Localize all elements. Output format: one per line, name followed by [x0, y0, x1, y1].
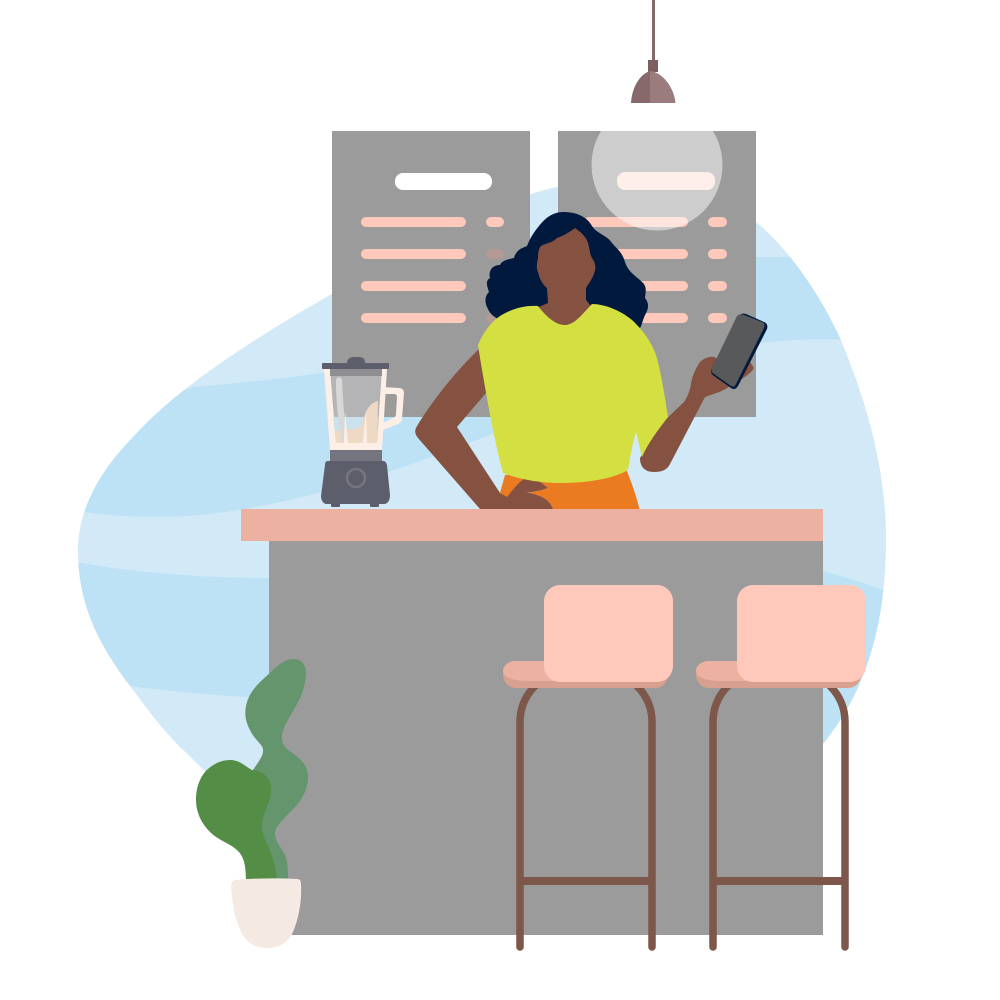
menu board left	[332, 131, 530, 417]
pendant lamp	[631, 0, 676, 103]
motor base	[321, 461, 390, 504]
smoothie	[335, 401, 378, 443]
potted plant	[196, 659, 308, 948]
back leaf	[245, 659, 308, 885]
left arm	[415, 349, 553, 509]
background blob	[78, 186, 886, 772]
feet	[331, 502, 340, 507]
jar glass	[330, 369, 382, 443]
stool right	[696, 585, 866, 947]
dial	[347, 469, 365, 487]
jar handle	[381, 387, 404, 431]
hair	[485, 212, 648, 328]
woman	[415, 212, 767, 509]
motor collar	[330, 450, 382, 461]
menu board right	[558, 100, 756, 417]
face and neck	[532, 228, 595, 332]
right arm	[640, 357, 754, 472]
pot	[231, 878, 301, 948]
jar highlights	[336, 377, 346, 443]
front leaf	[196, 760, 277, 885]
lid	[347, 357, 365, 363]
upper blue band	[60, 257, 860, 517]
lamp light pool	[592, 131, 722, 230]
shirt	[478, 304, 668, 483]
phone	[711, 314, 767, 389]
blender	[321, 357, 404, 507]
skirt	[500, 471, 640, 509]
jar	[324, 369, 387, 450]
lower blue band	[78, 562, 884, 744]
counter	[241, 509, 823, 935]
stool left	[503, 585, 673, 947]
